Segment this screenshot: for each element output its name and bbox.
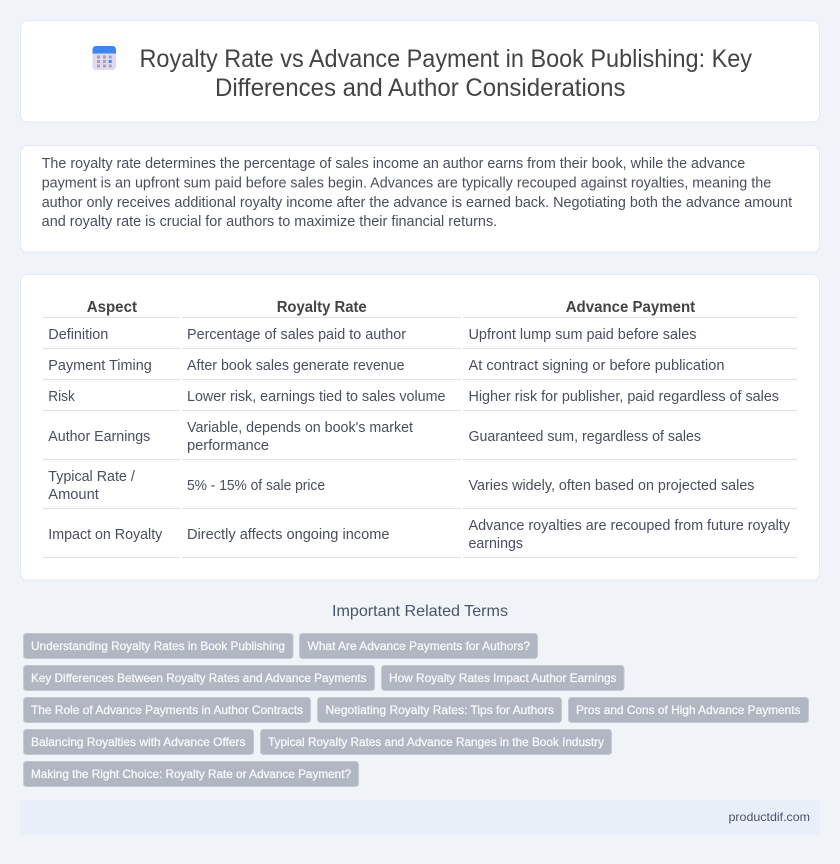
row: author earnings: performance xyxy=(187,438,269,454)
tag: Understanding Royalty Rates in Book Publishing xyxy=(31,639,285,653)
tag: Negotiating Royalty Rates: Tips for Authors xyxy=(326,703,554,717)
row: risk: Lower risk, earnings tied to sales volume xyxy=(187,389,446,405)
tag: Typical Royalty Rates and Advance Ranges in the Book Industry xyxy=(268,735,604,749)
tag xyxy=(568,698,808,722)
tag xyxy=(24,634,293,658)
row: typical rate or amount: Typical Rate / xyxy=(48,469,135,485)
tag xyxy=(260,730,612,754)
tag xyxy=(300,634,538,658)
icon: calendar xyxy=(92,46,116,70)
footer source text: productdif.com xyxy=(728,810,810,824)
row: typical rate or amount: 5% - 15% of sale price xyxy=(187,478,325,494)
row: definition xyxy=(48,327,697,343)
intro text block: The royalty rate determines the percentage of sales income an author earns from their book, while the advance xyxy=(42,156,745,172)
tag: Balancing Royalties with Advance Offers xyxy=(31,735,246,749)
comparison table panel xyxy=(20,274,820,580)
tag: What Are Advance Payments for Authors? xyxy=(308,639,530,653)
tag: How Royalty Rates Impact Author Earnings xyxy=(389,671,616,685)
related terms heading: Important Related Terms xyxy=(332,603,508,620)
row: typical rate or amount xyxy=(48,469,755,503)
table header row xyxy=(87,299,696,316)
title: Royalty Rate vs Advance Payment in Book Publishing: Key xyxy=(140,45,752,73)
row: author earnings: Author Earnings xyxy=(48,429,150,445)
tag xyxy=(382,666,624,690)
related terms section xyxy=(24,603,808,786)
tag: Key Differences Between Royalty Rates and Advance Payments xyxy=(31,671,366,685)
row: payment timing xyxy=(48,358,725,374)
row: author earnings: Guaranteed sum, regardless of sales xyxy=(468,429,701,445)
row: definition: Upfront lump sum paid before sales xyxy=(468,327,696,343)
tag: The Role of Advance Payments in Author Contracts xyxy=(31,703,303,717)
row: payment timing: Payment Timing xyxy=(48,358,152,374)
row: impact on royalty: Advance royalties are recouped from future royalty xyxy=(468,518,791,534)
row: definition: Percentage of sales paid to author xyxy=(187,327,406,343)
row: author earnings: Variable, depends on book's market xyxy=(187,420,413,436)
intro text block xyxy=(42,156,792,230)
footer bar xyxy=(20,800,820,834)
table header row: Advance Payment xyxy=(566,299,696,316)
table header row: Royalty Rate xyxy=(277,299,367,316)
tag xyxy=(318,698,562,722)
title xyxy=(140,45,752,102)
row: author earnings xyxy=(48,420,701,454)
row: definition: Definition xyxy=(48,327,108,343)
row: risk xyxy=(48,389,779,405)
tag xyxy=(24,762,358,786)
tag: Pros and Cons of High Advance Payments xyxy=(576,703,800,717)
intro text block: author only receives additional royalty income after the advance is earned back. Negotiating both the advance amount xyxy=(42,195,792,211)
tag xyxy=(24,666,374,690)
row: impact on royalty: Directly affects ongoing income xyxy=(187,527,390,543)
intro panel xyxy=(20,146,820,252)
header panel xyxy=(20,20,820,122)
tag: Making the Right Choice: Royalty Rate or Advance Payment? xyxy=(31,767,351,781)
title: Differences and Author Considerations xyxy=(215,74,626,102)
row: risk: Higher risk for publisher, paid regardless of sales xyxy=(468,389,779,405)
row: typical rate or amount: Varies widely, often based on projected sales xyxy=(468,478,754,494)
tag xyxy=(24,730,254,754)
intro text block: payment is an upfront sum paid before sales begin. Advances are typically recouped against royalties, meaning the xyxy=(42,176,771,192)
row: impact on royalty xyxy=(48,518,791,552)
row: impact on royalty: Impact on Royalty xyxy=(48,527,163,543)
row: payment timing: After book sales generate revenue xyxy=(187,358,404,374)
tag xyxy=(24,698,310,722)
table header row: Aspect xyxy=(87,299,138,316)
row: typical rate or amount: Amount xyxy=(48,487,99,503)
row: impact on royalty: earnings xyxy=(468,536,523,552)
row: risk: Risk xyxy=(48,389,76,405)
intro text block: and royalty rate is crucial for authors to maximize their financial returns. xyxy=(42,214,497,230)
row: payment timing: At contract signing or before publication xyxy=(468,358,724,374)
